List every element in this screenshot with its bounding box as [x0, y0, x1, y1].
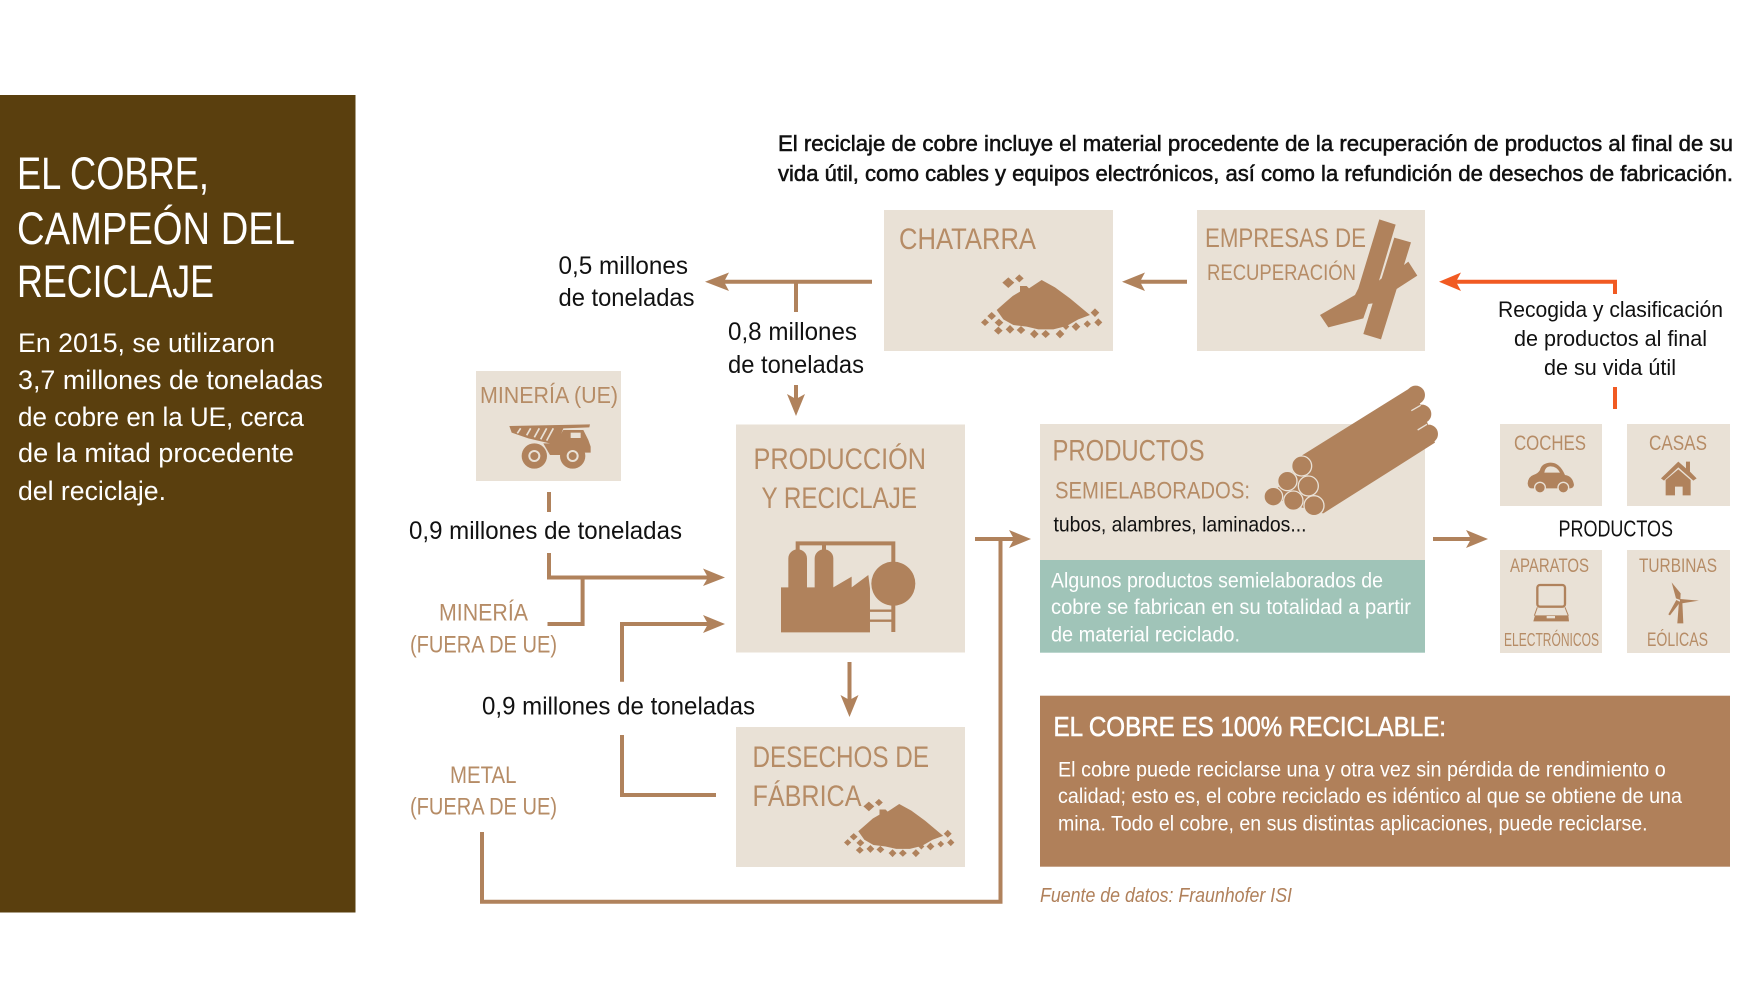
panel: casas	[1627, 424, 1730, 506]
panel: coches: COCHES	[1514, 432, 1586, 455]
icon: mining truck	[509, 424, 591, 469]
intro text: 3,7 millones de toneladas	[18, 365, 323, 395]
label: productos: PRODUCTOS	[1558, 516, 1673, 542]
arrow: semielaborados to productos	[1433, 530, 1488, 548]
recycled material note: cobre se fabrican en su totalidad a partir	[1051, 595, 1411, 619]
arrow: desechos to produccion	[622, 615, 725, 795]
panel: aparatos electronicos	[1500, 550, 1602, 653]
body text: calidad; esto es, el cobre reciclado es idéntico al que se obtiene de una	[1058, 785, 1682, 808]
arrow: 0,8 millones to produccion	[787, 385, 805, 416]
label: 0,8 millones	[728, 318, 864, 379]
icon: factory	[781, 543, 915, 632]
panel: casas: CASAS	[1649, 432, 1707, 455]
panel: desechos de fabrica: FÁBRICA	[752, 780, 862, 813]
label: 0,9 millones mineria: 0,9 millones de toneladas	[409, 517, 682, 545]
label: 0,8 millones: 0,8 millones	[728, 318, 857, 346]
label: mineria fuera de UE	[410, 600, 557, 658]
title	[17, 148, 295, 307]
top description	[778, 131, 1733, 186]
icon: scrap pile small	[844, 799, 954, 857]
arrow: mineria to produccion	[548, 492, 725, 624]
label: 0,5 millones: 0,5 millones	[558, 252, 688, 280]
panel: mineria UE	[476, 371, 621, 481]
title: CAMPEÓN DEL	[17, 203, 295, 254]
label: 0,8 millones: de toneladas	[728, 351, 864, 379]
panel: turbinas eolicas: TURBINAS	[1639, 555, 1717, 577]
panel: desechos de fabrica: DESECHOS DE	[752, 741, 929, 774]
recycled material note: Algunos productos semielaborados de	[1051, 569, 1383, 593]
body text	[1058, 759, 1682, 836]
intro text: de la mitad procedente	[18, 438, 294, 468]
panel: empresas de recuperacion: RECUPERACIÓN	[1207, 260, 1356, 285]
label: mineria fuera de UE: (FUERA DE UE)	[410, 632, 557, 658]
label: recogida y clasificacion: Recogida y clasificación	[1498, 297, 1723, 322]
recycled material note: de material reciclado.	[1051, 623, 1240, 647]
panel: produccion y reciclaje: PRODUCCIÓN	[754, 443, 926, 476]
panel: empresas de recuperacion	[1197, 210, 1425, 351]
panel: produccion y reciclaje: Y RECICLAJE	[762, 482, 917, 515]
label: 0,5 millones	[558, 252, 694, 312]
panel: mineria UE: MINERÍA (UE)	[480, 382, 618, 408]
panel: aparatos electronicos: ELECTRÓNICOS	[1504, 629, 1599, 650]
body text: mina. Todo el cobre, en sus distintas aplicaciones, puede reciclarse.	[1058, 813, 1648, 836]
label: 0,5 millones: de toneladas	[558, 284, 694, 312]
icon: crossed scrap bars	[1320, 219, 1417, 339]
label: metal fuera de UE	[410, 762, 557, 820]
title: EL COBRE,	[17, 148, 209, 199]
icon: copper tubes	[1264, 386, 1438, 516]
body text: El cobre puede reciclarse una y otra vez sin pérdida de rendimiento o	[1058, 759, 1666, 782]
panel: productos semielaborados: tubos, alambres, laminados...	[1054, 514, 1306, 537]
label: mineria fuera de UE: MINERÍA	[439, 600, 529, 626]
panel: turbinas eolicas	[1627, 550, 1730, 653]
top description: vida útil, como cables y equipos electrónicos, así como la refundición de desechos de fabricación.	[778, 161, 1733, 186]
top description: El reciclaje de cobre incluye el material procedente de la recuperación de productos al final de su	[778, 131, 1733, 156]
panel: chatarra: CHATARRA	[899, 223, 1036, 256]
label: 0,9 millones desechos: 0,9 millones de toneladas	[482, 692, 755, 720]
icon: scrap pile	[981, 274, 1102, 338]
panel: desechos de fabrica	[736, 727, 965, 867]
label: recogida y clasificacion	[1498, 297, 1723, 380]
panel: productos semielaborados	[1040, 386, 1438, 653]
panel: coches	[1500, 424, 1602, 506]
intro text: de cobre en la UE, cerca	[18, 402, 305, 432]
intro text	[18, 328, 323, 506]
panel: el cobre es 100% reciclable	[1040, 696, 1730, 867]
intro text: del reciclaje.	[18, 476, 166, 506]
arrow: recogida to empresas (orange)	[1439, 272, 1615, 409]
title: RECICLAJE	[17, 256, 214, 307]
icon: house	[1661, 462, 1697, 495]
panel: left intro	[0, 95, 356, 912]
arrow: metal to semielaborados	[482, 530, 1031, 902]
panel: turbinas eolicas: EÓLICAS	[1647, 628, 1708, 651]
panel: produccion y reciclaje	[736, 424, 965, 652]
label: recogida y clasificacion: de su vida útil	[1544, 355, 1676, 380]
panel: chatarra	[884, 210, 1113, 351]
panel: empresas de recuperacion: EMPRESAS DE	[1205, 223, 1366, 253]
icon: car	[1528, 463, 1574, 493]
arrow: chatarra to 0,5 millones with branch	[705, 272, 872, 312]
label: recogida y clasificacion: de productos al final	[1514, 326, 1707, 351]
intro text: En 2015, se utilizaron	[18, 328, 275, 358]
recycled material note	[1051, 569, 1411, 647]
source note: Fuente de datos: Fraunhofer ISI	[1040, 885, 1292, 907]
icon: laptop	[1533, 585, 1569, 621]
arrow: produccion to desechos	[840, 662, 858, 717]
panel: aparatos electronicos: APARATOS	[1510, 555, 1589, 577]
label: metal fuera de UE: METAL	[450, 762, 516, 789]
panel: el cobre es 100% reciclable: EL COBRE ES 100% RECICLABLE:	[1054, 711, 1446, 742]
panel: productos semielaborados: SEMIELABORADOS:	[1055, 478, 1250, 504]
panel: productos semielaborados: PRODUCTOS	[1052, 435, 1204, 468]
label: metal fuera de UE: (FUERA DE UE)	[410, 794, 557, 820]
arrow: empresas to chatarra	[1122, 272, 1187, 291]
icon: wind turbine	[1668, 582, 1699, 623]
